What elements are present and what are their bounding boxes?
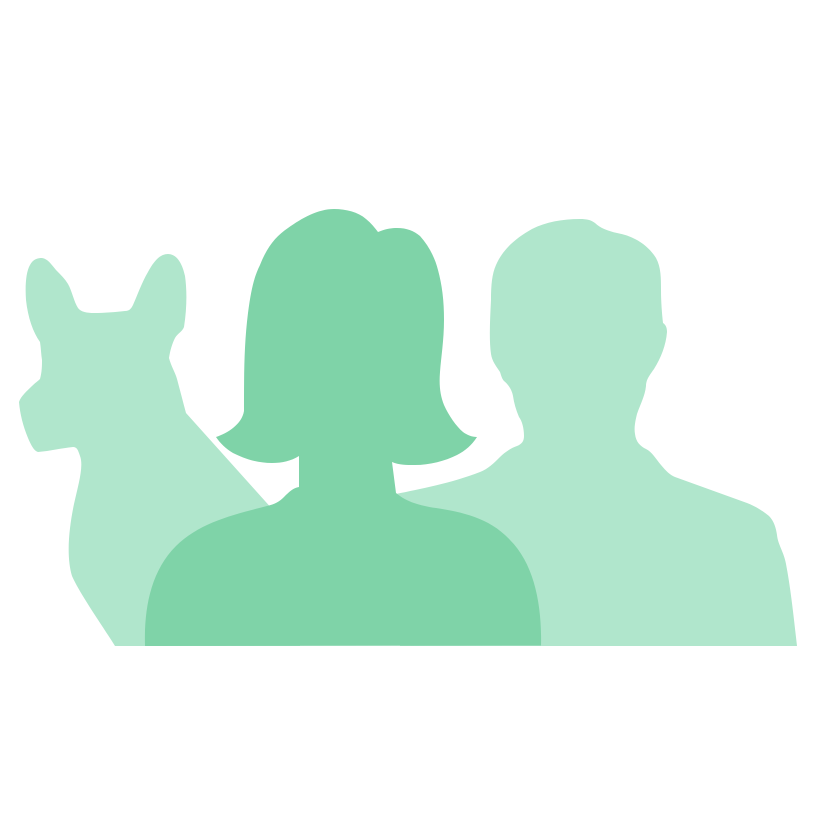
silhouette: man	[396, 219, 797, 646]
silhouette: woman	[145, 209, 541, 646]
silhouette: dog	[19, 254, 300, 646]
